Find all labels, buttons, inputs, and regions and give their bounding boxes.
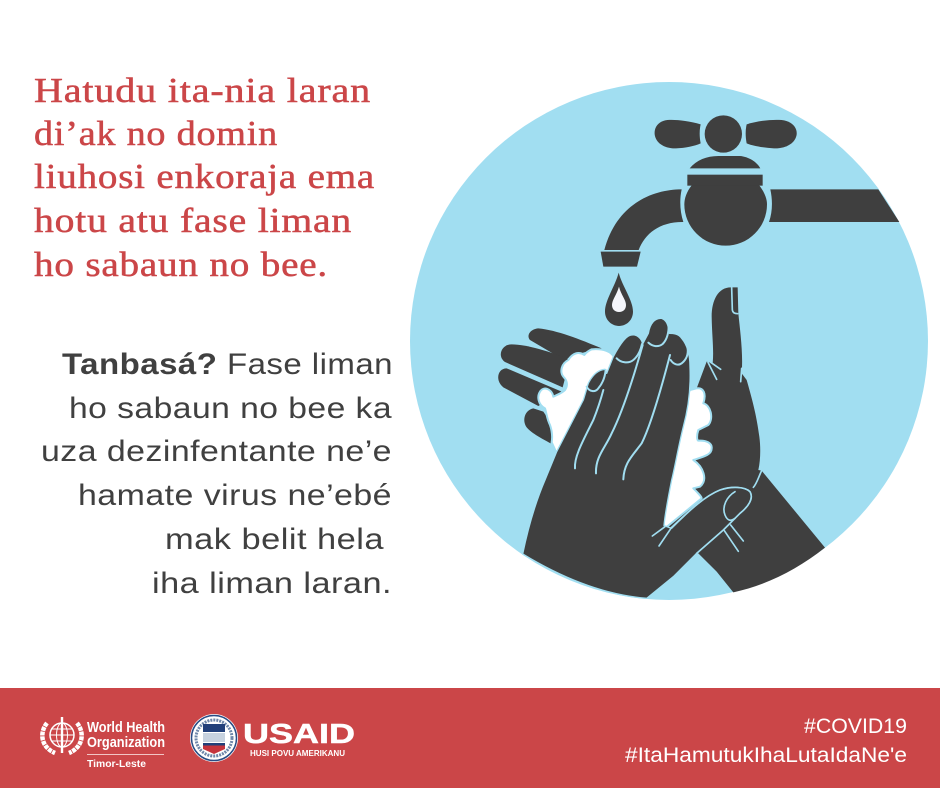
icon: WHO emblem	[42, 717, 82, 753]
logo: USAID: USAID	[243, 718, 355, 749]
heading: hotu atu fase liman	[34, 201, 352, 240]
logo: USAID: HUSI POVU AMERIKANU	[250, 749, 345, 758]
illustration: hand washing	[410, 82, 928, 600]
logo: World Health Organization: Timor-Leste	[87, 759, 146, 770]
heading: Hatudu ita-nia laran	[34, 71, 371, 110]
body text: iha liman laran.	[152, 567, 392, 600]
rear hand creases	[708, 287, 762, 487]
icon: soapy hands	[498, 287, 825, 598]
hashtags: #ItaHamutukIhaLutaIdaNe'e	[625, 744, 907, 767]
icon: USAID seal	[190, 714, 238, 762]
icon: faucet	[601, 115, 899, 326]
heading: ho sabaun no bee.	[34, 245, 328, 284]
logo: World Health Organization: Organization	[87, 735, 165, 751]
background circle	[410, 82, 928, 600]
logo: World Health Organization: World Health	[87, 720, 165, 736]
heading: di’ak no domin	[34, 114, 278, 153]
body text: ho sabaun no bee ka	[69, 392, 392, 425]
body text: mak belit hela	[165, 523, 384, 556]
thumb lines	[652, 487, 751, 553]
footer band	[0, 688, 940, 788]
body text: Tanbasá? Fase liman	[62, 348, 393, 381]
body text: uza dezinfentante ne’e	[41, 435, 392, 468]
heading	[34, 71, 375, 284]
hashtags: #COVID19	[804, 715, 907, 738]
finger lines and nails	[575, 323, 688, 479]
logo: USAID	[190, 714, 355, 762]
front hand	[523, 318, 751, 598]
logo: World Health Organization	[42, 717, 165, 770]
heading: liuhosi enkoraja ema	[34, 157, 375, 196]
body text	[41, 348, 393, 600]
hashtags	[625, 715, 907, 767]
soap foam	[538, 349, 712, 528]
body text: hamate virus ne’ebé	[78, 479, 392, 512]
rear hand	[498, 287, 825, 592]
